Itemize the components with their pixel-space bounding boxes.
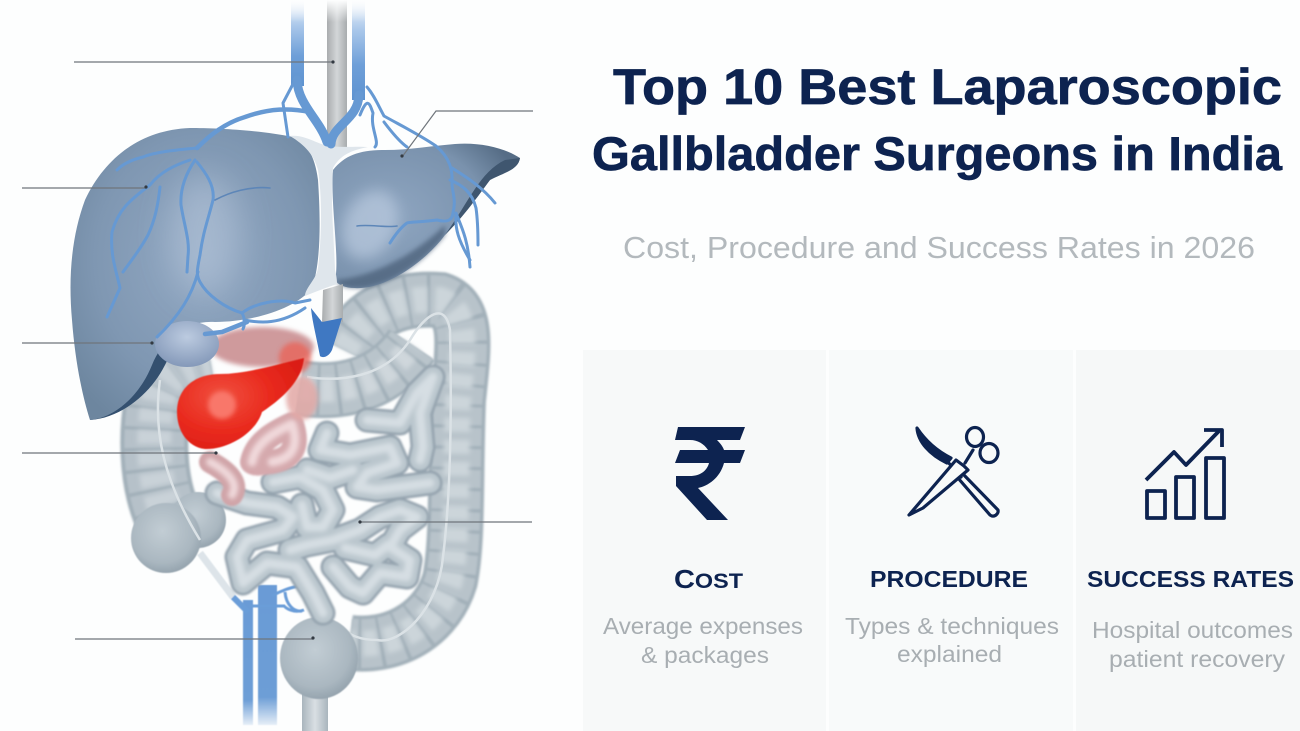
cecum: [170, 492, 226, 548]
right lobe: [71, 128, 320, 420]
anatomy leader lines: [22, 60, 533, 640]
pancreas tissue: [210, 327, 314, 367]
text: success rates description: patient recovery: [1109, 646, 1286, 672]
ascending colon: [154, 360, 210, 525]
text: success rates description: Hospital outcomes: [1092, 617, 1293, 643]
left lobe lower edge shade: [335, 225, 445, 288]
reddish tissue near neck: [279, 342, 311, 374]
right lobe highlight: [171, 175, 239, 295]
heading: procedure: PROCEDURE: [870, 566, 1028, 592]
text: procedure description: explained: [897, 641, 1002, 667]
text: procedure description: Types & techniques: [845, 613, 1059, 639]
red gallbladder: [177, 358, 304, 449]
lower veins: [200, 553, 304, 725]
heading: success rates: SUCCESS RATES: [1087, 566, 1294, 592]
panel: procedure: [829, 350, 1073, 731]
icon: scalpel and scissors: [909, 428, 998, 516]
sigmoid bulb: [280, 617, 358, 699]
pink colon blush: [286, 376, 318, 420]
anatomy illustration: [71, 0, 520, 731]
falciform ligament: [290, 136, 368, 296]
upper grey vessel: [327, 0, 347, 148]
title: [592, 59, 1283, 180]
pink duodenum loops: [210, 424, 295, 495]
lower grey vessel: [322, 284, 343, 322]
text: success rates description: [1092, 617, 1293, 672]
transverse and descending colon: [300, 300, 462, 644]
left lobe shadow: [445, 158, 520, 235]
hepatic veins: [107, 0, 495, 337]
liver underside shadow: [90, 335, 175, 420]
left lobe highlight: [331, 181, 409, 269]
panel: success rates: [1076, 350, 1300, 731]
left lobe: [332, 144, 520, 288]
liver: [71, 128, 520, 420]
panel: cost: [583, 350, 826, 731]
taenia line left: [158, 380, 200, 540]
top fade: [285, 0, 370, 22]
text: cost description: [603, 613, 803, 668]
title line 1: Top 10 Best Laparoscopic: [613, 59, 1282, 115]
text: cost description: Average expenses: [603, 613, 803, 639]
upper vein stems: [291, 0, 304, 86]
text: cost description: & packages: [641, 642, 769, 668]
small intestine: [217, 377, 433, 613]
icon: rupee: [675, 427, 745, 520]
gallbladder structure (blue-grey): [155, 321, 219, 367]
subtitle: Cost, Procedure and Success Rates in 2026: [623, 230, 1255, 265]
title line 2: Gallbladder Surgeons in India: [592, 127, 1283, 180]
blue duct funnel: [311, 308, 342, 357]
heading: cost: COST: [674, 564, 743, 594]
text: procedure description: [845, 613, 1059, 667]
large intestine: [131, 300, 462, 731]
taenia line right: [307, 313, 451, 640]
icon: growth chart: [1146, 430, 1224, 518]
rectum stem: [302, 690, 328, 731]
gallbladder highlight: [208, 391, 236, 419]
